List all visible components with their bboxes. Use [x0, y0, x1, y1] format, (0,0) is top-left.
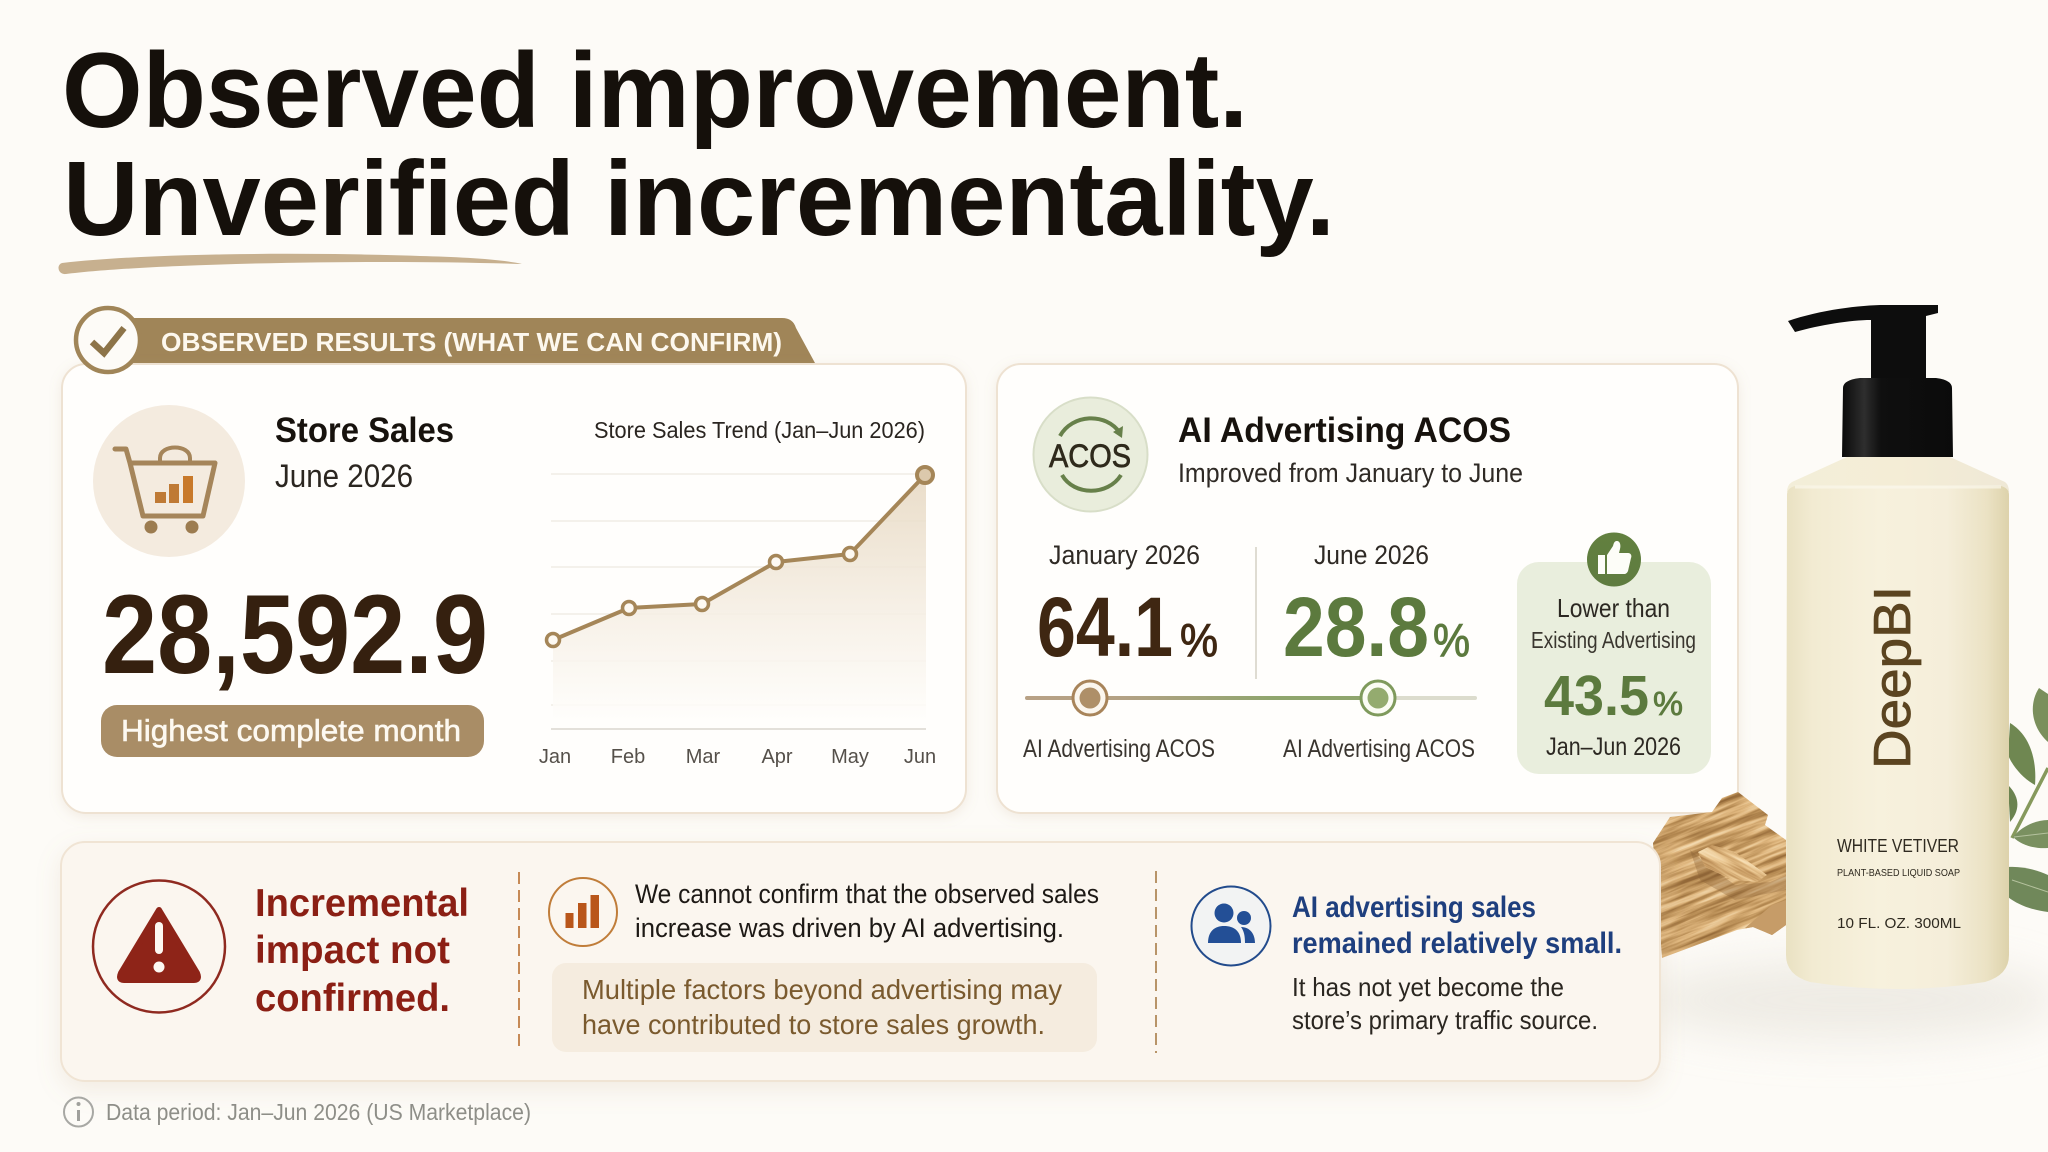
icon: ACOS cycle: ACOS — [1049, 438, 1131, 474]
metric: january 2026: % — [1180, 614, 1218, 666]
chart: store sales trend: Feb — [611, 746, 645, 768]
heading: AI advertising sales: AI advertising sales — [1292, 891, 1536, 924]
slider labels — [1023, 735, 1475, 763]
chart: store sales trend: Store Sales Trend (Jan–Jun 2026) — [594, 417, 925, 443]
text: product label — [1837, 836, 1961, 932]
chart: store sales trend — [539, 417, 936, 768]
callout: lower than existing advertising: Existing Advertising — [1531, 627, 1696, 653]
chart: store sales trend: Mar — [686, 746, 721, 768]
chart: store sales trend: May — [831, 746, 869, 768]
panel: AI advertising ACOS — [997, 364, 1738, 813]
text: product label: 10 FL. OZ. 300ML — [1837, 915, 1961, 932]
pill: highest complete month — [101, 705, 484, 757]
icon: shopping cart with bars — [93, 405, 245, 557]
callout: multiple factors: Multiple factors beyond advertising may — [582, 974, 1062, 1005]
metric: june 2026: 28.8 — [1283, 580, 1429, 674]
callout: lower than existing advertising — [1517, 532, 1711, 774]
text: product label: WHITE VETIVER — [1837, 836, 1959, 856]
text: primary traffic source — [1292, 972, 1598, 1035]
section tab: observed results: OBSERVED RESULTS (WHAT WE CAN CONFIRM) — [161, 327, 782, 357]
icon: ACOS cycle — [1034, 398, 1148, 512]
text: product label: PLANT-BASED LIQUID SOAP — [1837, 868, 1960, 879]
heading: AI advertising sales — [1292, 891, 1622, 960]
illustration: DeepBI soap bottle — [1786, 305, 2009, 989]
icon: thumbs up — [1587, 532, 1641, 586]
icon: check badge — [76, 308, 140, 372]
chart: store sales trend: Apr — [761, 746, 793, 768]
callout: lower than existing advertising: Lower than — [1557, 593, 1670, 623]
icon: people — [1192, 886, 1270, 966]
big number: store sales: 28,592.9 — [102, 572, 488, 697]
chart: store sales trend: Jun — [904, 746, 936, 768]
chart: store sales trend: Jan — [539, 746, 571, 768]
slider: ACOS change — [1025, 681, 1477, 715]
heading: store sales: Store Sales — [275, 411, 454, 450]
metric: january 2026: January 2026 — [1049, 540, 1200, 570]
callout: multiple factors: have contributed to store sales growth. — [582, 1009, 1045, 1040]
callout: multiple factors — [552, 963, 1097, 1052]
metric: june 2026 — [1283, 540, 1470, 674]
heading: AI advertising sales: remained relatively small. — [1292, 927, 1622, 960]
callout: lower than existing advertising: % — [1653, 685, 1683, 722]
text: cannot confirm: We cannot confirm that the observed sales — [635, 879, 1099, 909]
heading: incremental impact not confirmed: confirmed. — [255, 977, 450, 1020]
slider labels: AI Advertising ACOS — [1283, 735, 1475, 763]
slider labels: AI Advertising ACOS — [1023, 735, 1215, 763]
metric: june 2026: June 2026 — [1314, 540, 1429, 570]
text: primary traffic source: store’s primary traffic source. — [1292, 1005, 1598, 1035]
text: cannot confirm: increase was driven by AI advertising. — [635, 913, 1064, 943]
metric: january 2026: 64.1 — [1037, 580, 1173, 674]
panel: incremental impact — [61, 842, 1660, 1081]
text: DeepBI brand: DeepBI — [1864, 586, 1922, 769]
icon: warning triangle — [93, 880, 225, 1012]
title — [62, 30, 1335, 258]
heading: incremental impact not confirmed: Incremental — [255, 882, 469, 925]
callout: lower than existing advertising: 43.5 — [1544, 664, 1649, 728]
illustration: leaves — [2008, 688, 2048, 912]
subheading: improved: Improved from January to June — [1178, 458, 1523, 488]
title: Observed improvement. — [62, 30, 1248, 150]
heading: incremental impact not confirmed: impact not — [255, 929, 450, 972]
callout: lower than existing advertising: Jan–Jun 2026 — [1546, 733, 1681, 761]
title: Unverified incrementality. — [63, 140, 1335, 258]
metric: january 2026 — [1037, 540, 1218, 674]
text: cannot confirm — [635, 879, 1099, 943]
panel: store sales — [62, 364, 966, 813]
heading: incremental impact not confirmed — [255, 882, 469, 1020]
subheading: june 2026: June 2026 — [275, 458, 413, 494]
divider — [1255, 547, 1257, 679]
section tab: observed results — [125, 318, 815, 363]
footer: data period note: Data period: Jan–Jun 2026 (US Marketplace) — [106, 1099, 531, 1125]
heading: AI advertising ACOS: AI Advertising ACOS — [1178, 411, 1511, 450]
pill: highest complete month: Highest complete month — [121, 713, 461, 748]
illustration: vetiver wood — [1653, 792, 1786, 958]
icon: bar chart — [549, 878, 617, 946]
title underline brush stroke — [59, 254, 522, 274]
text: primary traffic source: It has not yet become the — [1292, 972, 1564, 1002]
metric: june 2026: % — [1433, 614, 1470, 666]
